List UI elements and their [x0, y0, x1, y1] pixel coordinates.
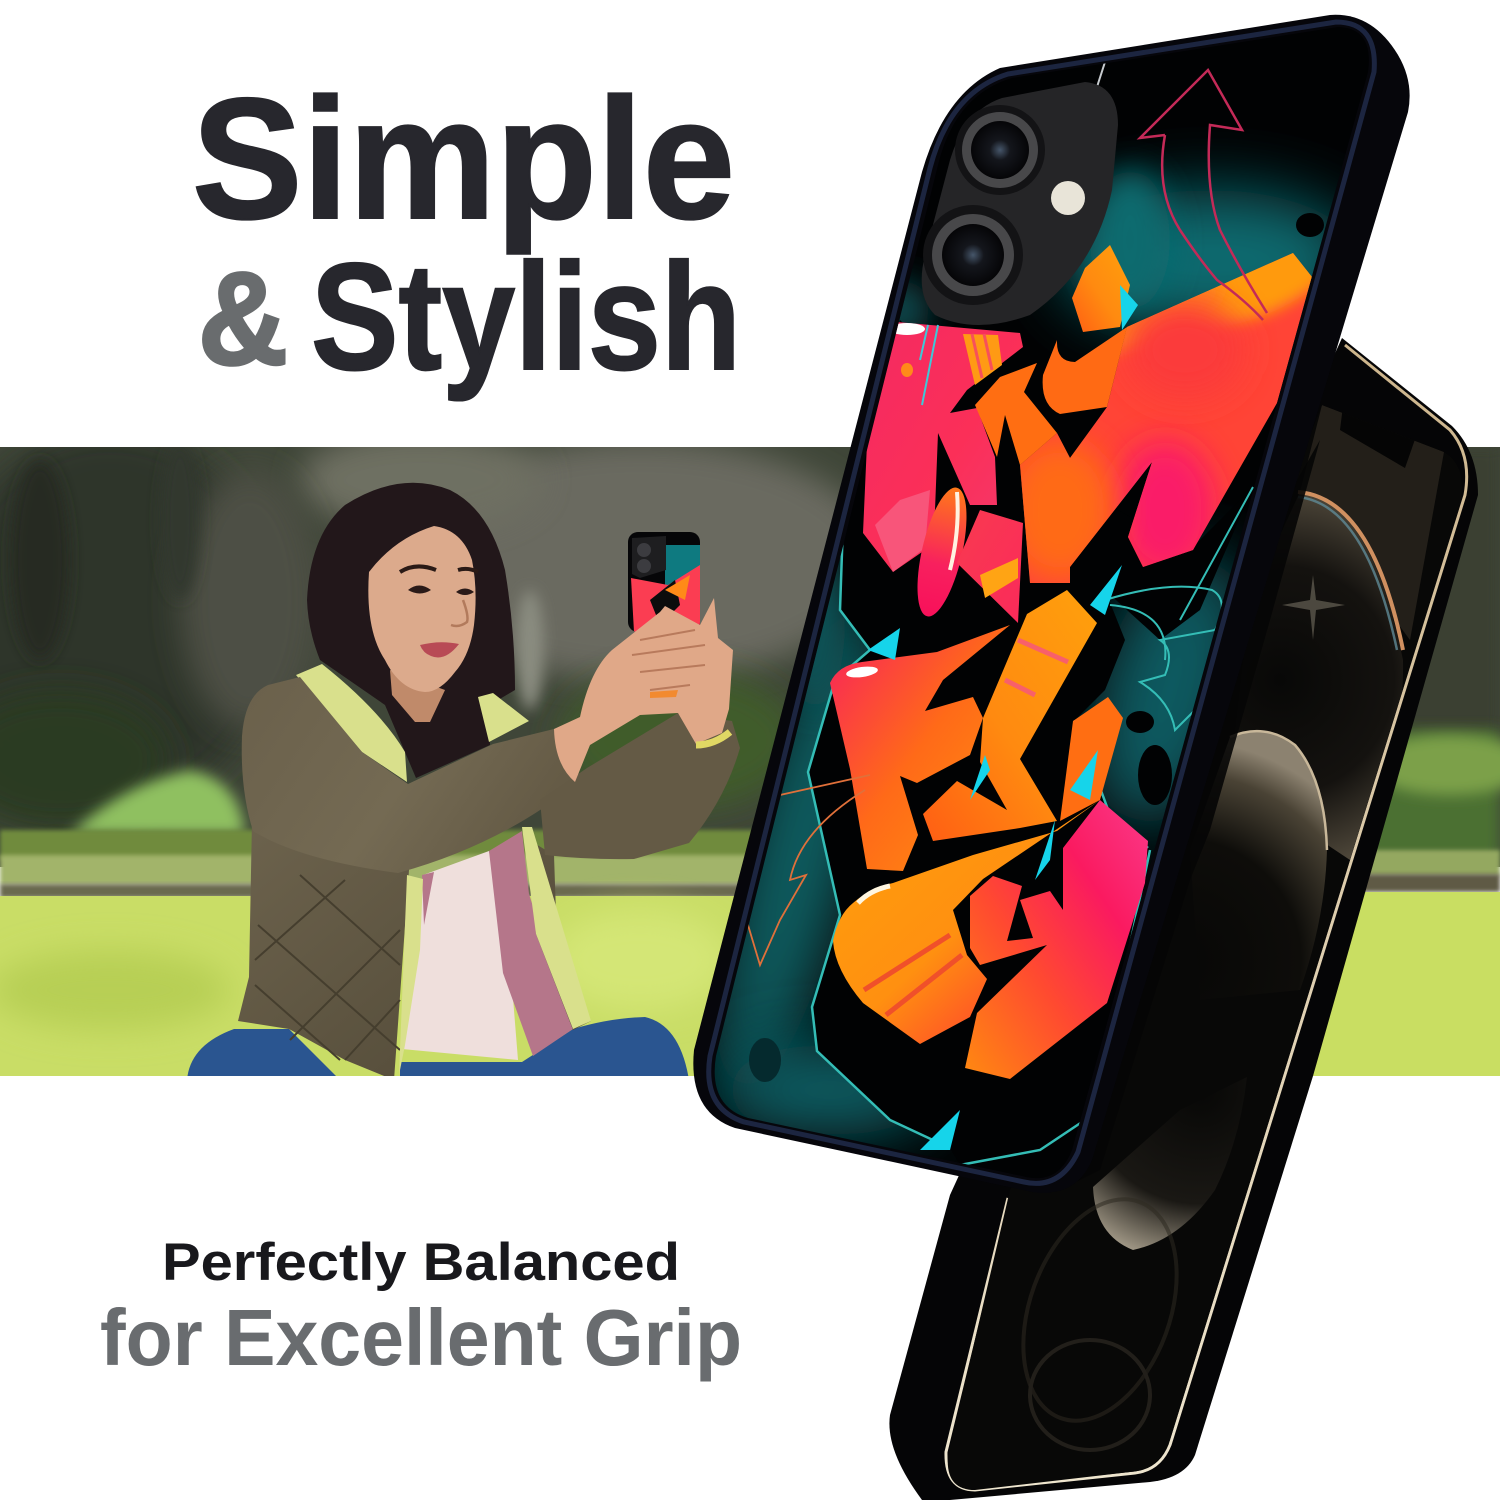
wallpaper [948, 405, 1444, 1490]
arm left [242, 677, 576, 873]
jacket body [238, 828, 591, 1076]
arm right [540, 713, 740, 859]
lens top [955, 105, 1045, 195]
bottom petal [1093, 1128, 1237, 1250]
plaid shirt [422, 831, 573, 1056]
white top [402, 851, 518, 1060]
mid left letter E [830, 625, 1010, 871]
lens bottom [923, 205, 1023, 305]
left pink letter [863, 322, 1023, 572]
heading: Simple & Stylish [192, 63, 741, 402]
rear phone body [889, 338, 1478, 1500]
teal outlines [808, 523, 1150, 1165]
black letter halo [808, 320, 1253, 1165]
hands and forearm [554, 598, 733, 782]
star flare [1282, 575, 1345, 640]
upper orange letter [1072, 245, 1130, 332]
park background [0, 430, 1500, 1076]
upper orb [1276, 495, 1403, 860]
wallpaper top glow [1300, 405, 1444, 640]
right side teal line work [1105, 487, 1253, 730]
tagline line 1: Perfectly Balanced [162, 1233, 680, 1292]
eyes, eyebrows and mouth [400, 566, 478, 658]
ampersand: & [198, 245, 288, 392]
case edge [709, 22, 1374, 1183]
photo band: woman taking selfie in park [0, 430, 1500, 1080]
flash [1051, 181, 1085, 215]
gold frame [946, 345, 1467, 1490]
phone glimpse under hand [650, 690, 678, 698]
right orange letter [1060, 697, 1123, 821]
cyan splashes [868, 285, 1138, 1150]
large swirl shape [1206, 732, 1327, 990]
centre orange stroke [923, 590, 1097, 841]
tagline line 2: for Excellent Grip [100, 1293, 742, 1382]
rear phone: iPhone with gold frame [889, 338, 1490, 1500]
camera module [922, 82, 1118, 325]
front phone: graffiti case [684, 10, 1410, 1200]
pink oval [908, 483, 976, 621]
tagline: Perfectly Balanced for Excellent Grip [100, 1233, 742, 1382]
face [368, 526, 476, 692]
hair [307, 483, 515, 778]
graffiti artwork [714, 27, 1368, 1178]
white seam [1096, 62, 1105, 90]
bracelet [696, 732, 730, 745]
lapels [296, 664, 591, 1075]
orange arrow line [742, 775, 870, 965]
quilting lines [255, 875, 400, 1060]
rainbow arc [1298, 492, 1403, 650]
black drips [749, 213, 1324, 1082]
centre orange notch piece [975, 363, 1057, 465]
lower right pink letter [965, 800, 1148, 1079]
heading line: Simple: Simple [192, 63, 735, 255]
woman [187, 483, 740, 1080]
centre inner orange [1043, 327, 1127, 414]
jeans [187, 1017, 689, 1080]
rear phone shadow [1060, 440, 1320, 1190]
case outline [693, 15, 1410, 1193]
faint lower arcs [1022, 1198, 1178, 1452]
mini phone [628, 532, 700, 632]
teal glow [684, 170, 1360, 1135]
earpiece notch [1340, 413, 1414, 468]
neck [390, 670, 445, 722]
upper right big letter [1020, 253, 1312, 583]
heading line: Stylish: Stylish [311, 232, 741, 402]
magenta arrow [1140, 70, 1267, 320]
swirl rim [1230, 731, 1327, 850]
fingers [632, 630, 705, 690]
lower orange ball letter [833, 800, 1100, 1044]
left letter details [875, 323, 1002, 572]
small pink block [957, 510, 1023, 623]
